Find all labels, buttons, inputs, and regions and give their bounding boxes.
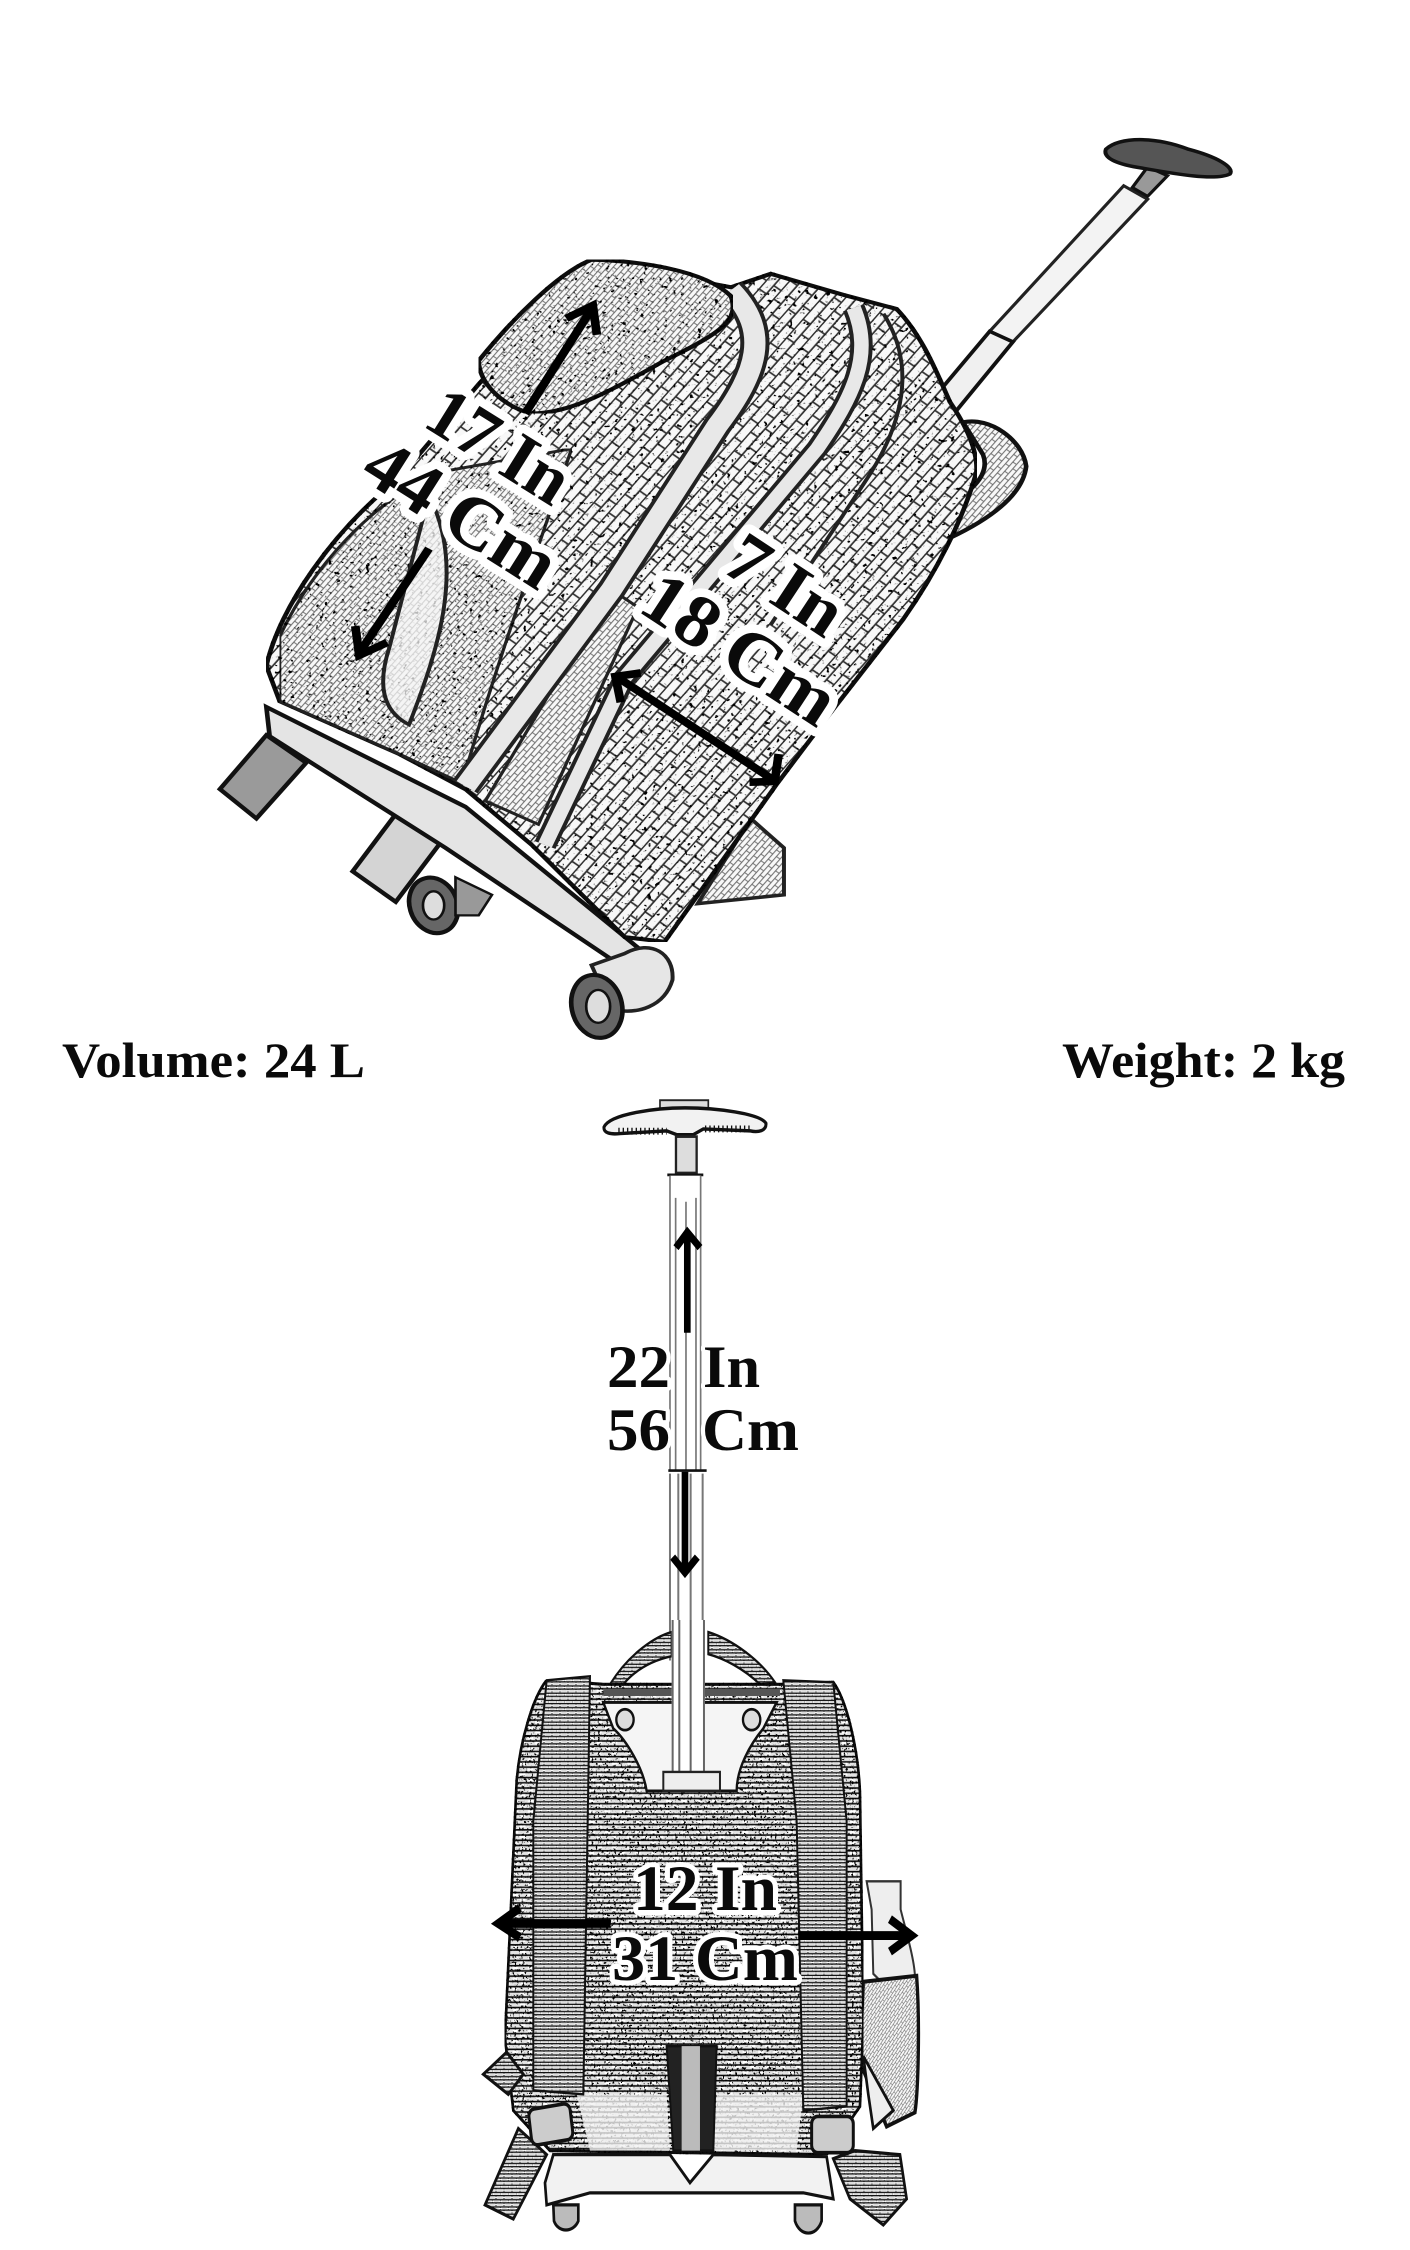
label: 18 Cm: 18 Cm	[627, 556, 853, 743]
label: 22 In: In	[703, 1334, 760, 1400]
main bag body	[266, 261, 977, 942]
wheels	[402, 873, 673, 1041]
wheels	[553, 2205, 822, 2233]
metal mounting plate	[603, 1692, 780, 1791]
handle grip	[604, 1100, 766, 1195]
label: 7 In: 7 In	[711, 517, 860, 653]
shoulder straps	[533, 1676, 847, 2110]
arrow: down	[673, 1472, 697, 1572]
telescopic handle	[938, 140, 1231, 411]
side mesh pocket	[860, 1976, 918, 2127]
arrow: height lower	[355, 549, 429, 655]
trolley base and legs	[220, 707, 638, 968]
arrow: depth	[615, 673, 779, 782]
label: 56 Cm	[607, 1397, 799, 1463]
carry handle arc	[610, 1632, 775, 1684]
volume label: Volume: 24 L	[62, 1032, 365, 1088]
trolley base	[545, 2155, 833, 2205]
label: 17 In: 17 In	[413, 371, 586, 521]
arrow: width left	[498, 1908, 611, 1938]
zipper bands	[465, 290, 902, 845]
arrow: up	[676, 1232, 700, 1333]
arrow: width right	[798, 1919, 912, 1952]
label: 31 Cm: 31 Cm	[612, 1923, 798, 1995]
lower light panel	[577, 2094, 803, 2151]
arrow: height upper	[525, 305, 597, 414]
shoulder strap loop	[943, 421, 1026, 538]
telescopic pole	[668, 1176, 707, 1661]
top view: angled rolling backpack	[220, 140, 1231, 1041]
label: 12 In: 12 In	[633, 1853, 777, 1925]
top pocket	[479, 260, 733, 414]
bottom zipper pocket	[667, 2046, 717, 2151]
label: 22 In	[607, 1334, 760, 1400]
water bottle	[867, 1881, 915, 1984]
lower view: backpack back	[483, 1620, 918, 2233]
lower view: extended handle	[604, 1100, 766, 1661]
side mesh pocket	[698, 819, 784, 904]
label: 22 In: 22	[607, 1334, 670, 1400]
weight label: Weight: 2 kg	[1062, 1032, 1345, 1088]
pole lower section	[663, 1620, 720, 1791]
label: 56 Cm: 56	[607, 1397, 670, 1463]
lower straps and buckles	[483, 2052, 907, 2225]
back panel body	[505, 1680, 863, 2155]
label: 44 Cm: 44 Cm	[349, 422, 574, 606]
front pocket panels	[280, 449, 638, 824]
label: 56 Cm: Cm	[702, 1397, 799, 1463]
